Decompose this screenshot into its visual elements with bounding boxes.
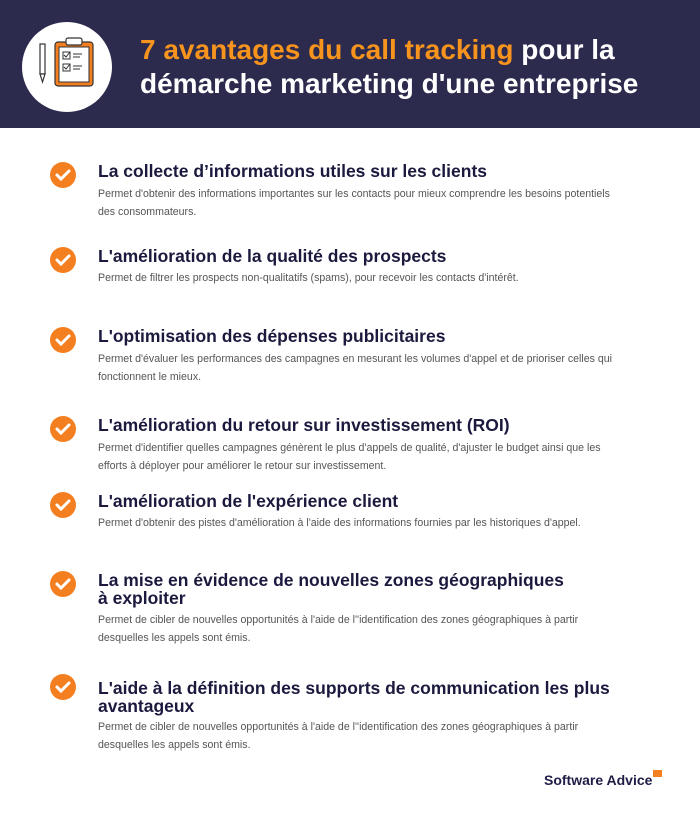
icon: clipboard (22, 22, 112, 112)
icon: check (50, 162, 76, 188)
heading: à exploiter (98, 588, 186, 608)
heading: L'amélioration de la qualité des prospects (98, 246, 446, 266)
heading: La mise en évidence de nouvelles zones géographiques (98, 570, 564, 590)
item 7 (50, 674, 610, 751)
heading (98, 570, 564, 608)
item 3 (50, 326, 612, 383)
item 5 (50, 491, 581, 529)
header (0, 0, 700, 128)
text: Permet d'identifier quelles campagnes génèrent le plus d'appels de qualité, d'ajuster le budget ainsi que les efforts à déployer pour améliorer le retour sur investissement. (98, 442, 601, 472)
icon: check (50, 492, 76, 518)
icon: check (50, 416, 76, 442)
item 2 (50, 246, 519, 284)
text: Permet de filtrer les prospects non-qualitatifs (spams), pour recevoir les contacts d'intérêt. (98, 272, 519, 284)
title (140, 34, 638, 99)
logo: Software Advice (544, 772, 652, 788)
text: Permet de cibler de nouvelles opportunités à l'aide de l''identification des zones géographiques à partir desquelles les appels sont émis. (98, 721, 578, 751)
text: Permet d'obtenir des informations importantes sur les contacts pour mieux comprendre les besoins potentiels des consommateurs. (98, 188, 610, 218)
heading: L'amélioration du retour sur investissement (ROI) (98, 415, 510, 435)
heading: L'aide à la définition des supports de communication les plus avantageux (98, 678, 610, 716)
item 6 (50, 570, 578, 644)
title: 7 avantages du call tracking pour la (140, 34, 615, 65)
title: démarche marketing d'une entreprise (140, 68, 638, 99)
text: Permet d'évaluer les performances des campagnes en mesurant les volumes d'appel et de prioriser celles qui fonctionnent le mieux. (98, 353, 612, 383)
text: Permet d'obtenir des pistes d'amélioration à l'aide des informations fournies par les historiques d'appel. (98, 517, 581, 529)
item 1 (50, 161, 610, 218)
icon: check (50, 327, 76, 353)
heading: L'optimisation des dépenses publicitaires (98, 326, 445, 346)
text: Permet de cibler de nouvelles opportunités à l'aide de l''identification des zones géographiques à partir desquelles les appels sont émis. (98, 614, 578, 644)
icon: check (50, 674, 76, 700)
icon: check (50, 571, 76, 597)
item 4 (50, 415, 601, 472)
icon: check (50, 247, 76, 273)
heading: La collecte d’informations utiles sur les clients (98, 161, 487, 181)
heading: L'amélioration de l'expérience client (98, 491, 398, 511)
